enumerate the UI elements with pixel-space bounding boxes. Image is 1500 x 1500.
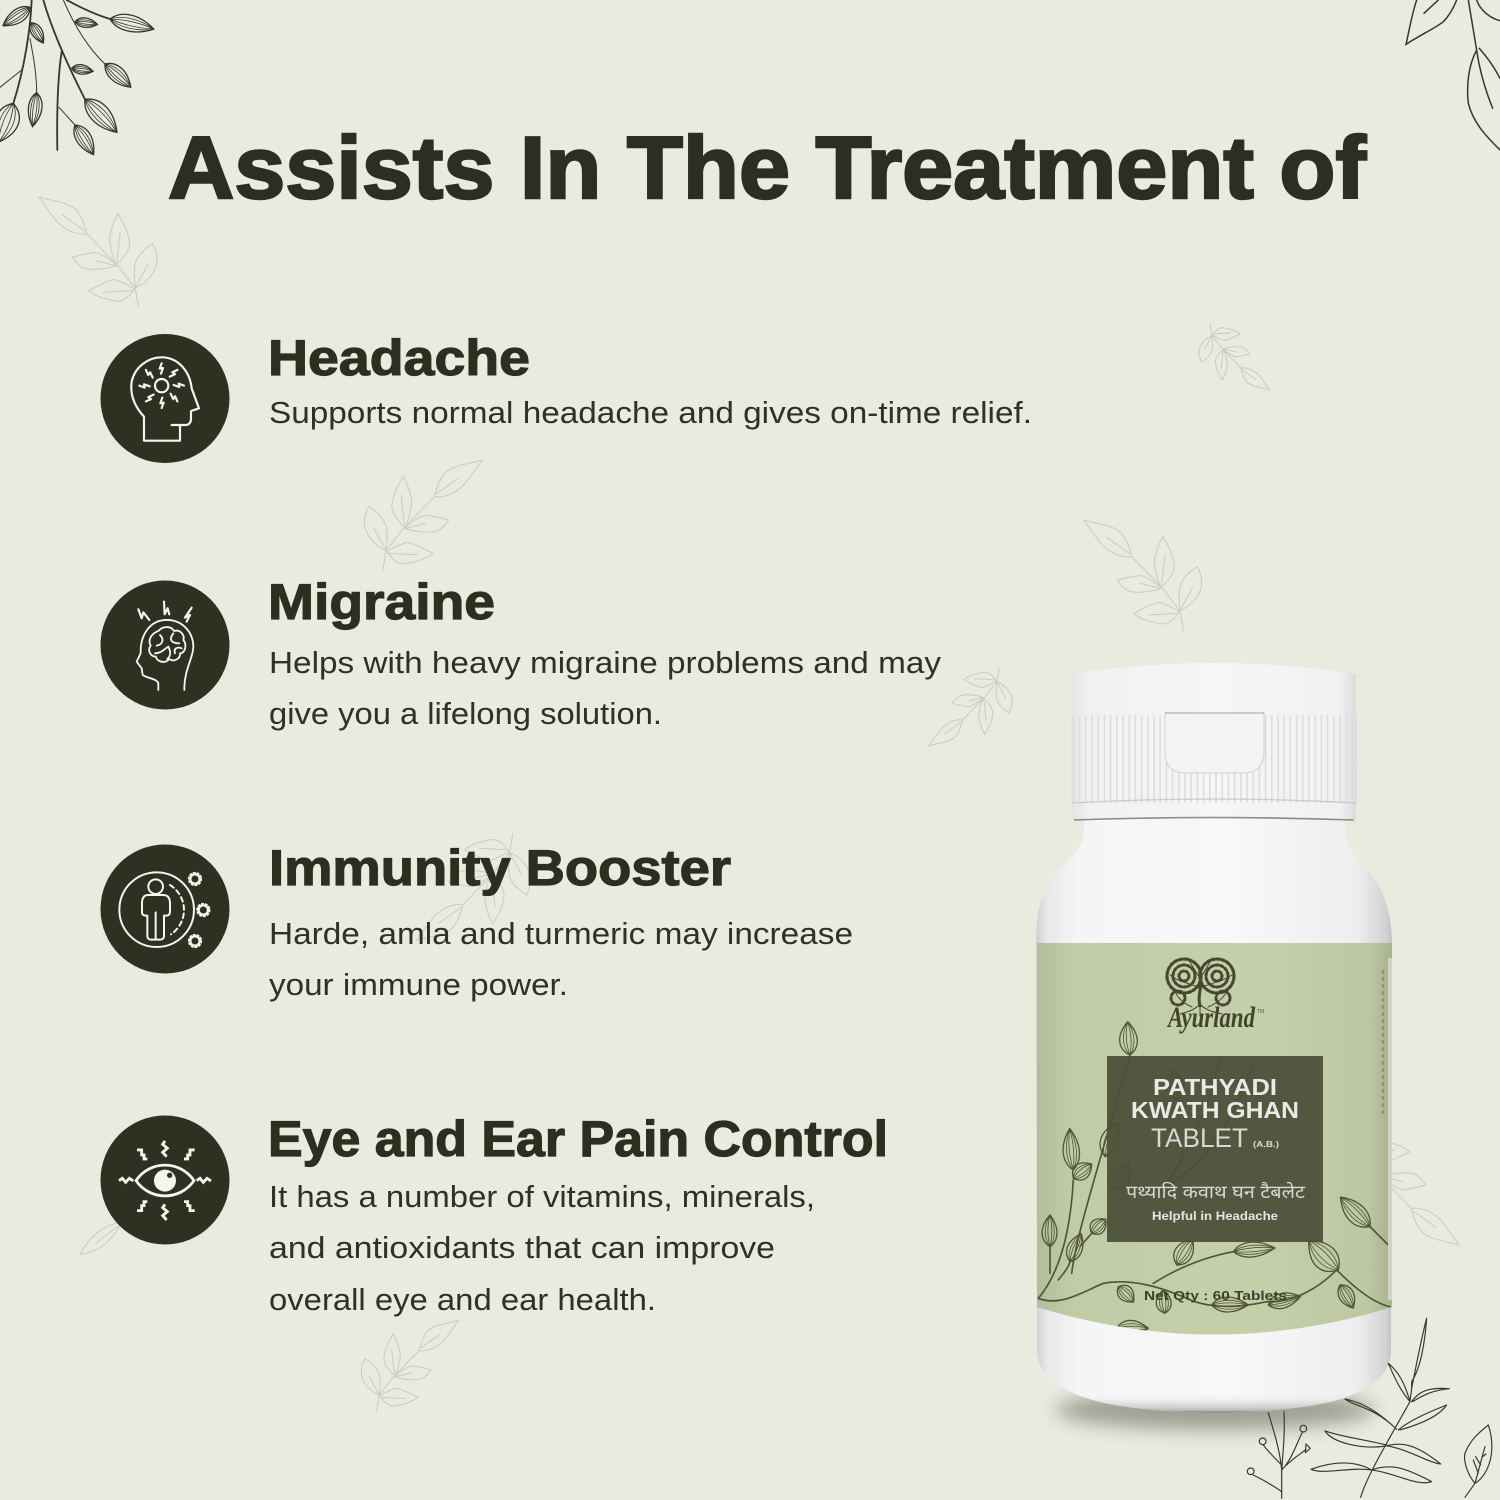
text: migraine description [269,645,942,731]
icon: eye with radiating pain [100,1116,230,1244]
product bottle [1036,663,1392,1430]
bottle cap [1071,663,1357,820]
icon: person in protective circle with germs [100,844,230,974]
heading: headache: Headache [268,330,530,386]
label title panel [1107,1056,1323,1242]
decoration: top-left dark branch [0,0,156,158]
item: eye and ear pain control [100,1111,888,1317]
label right edge strip [1388,958,1392,1300]
product form: TABLET [1151,1123,1248,1153]
plant: fern sprig [1311,1318,1449,1497]
product name line 1: PATHYADI [1153,1074,1277,1100]
plant: bud sprig [1247,1412,1310,1498]
text: eye and ear description: It has a number of vitamins, minerals, [269,1179,815,1214]
item: migraine [100,574,942,731]
text: immunity description [269,916,853,1002]
bottle label [1037,943,1392,1343]
heading: eye and ear pain control: Eye and Ear Pain Control [268,1111,888,1167]
decoration: faint sprig right of headache [1199,324,1270,390]
trademark: TM [1257,1009,1264,1015]
label edge print [1382,970,1384,1115]
product name line 2: KWATH GHAN [1131,1097,1299,1123]
decoration: faint sprig right of bottle [1341,1134,1459,1245]
icon: head with radiating pain [100,334,230,463]
hindi product name: पथ्यादि कवाथ घन टैबलेट [1126,1181,1306,1202]
product form suffix: (A.B.) [1253,1139,1279,1149]
bottle shadow [1055,1390,1375,1430]
heading: immunity booster: Immunity Booster [269,840,731,896]
item: immunity booster [100,840,853,1002]
decoration: top-right dark leaves [1406,0,1500,150]
heading: migraine: Migraine [268,574,495,630]
decoration: faint leaf behind eye icon [80,1222,122,1254]
text: eye and ear description: and antioxidants that can improve [269,1230,775,1265]
logo: Ayurland tree [1167,958,1234,1016]
text: headache description: Supports normal headache and gives on-time relief. [269,395,1032,430]
decoration: bottom-right dark plants [1247,1318,1492,1498]
decoration: faint sprig under headache [364,460,482,571]
title: Assists In The Treatment of [168,118,1367,217]
label botanical artwork [1038,1021,1390,1335]
logo wordmark: Ayurland [1166,1001,1256,1034]
decoration: faint sprig bottom [361,1320,458,1412]
text: eye and ear description [269,1179,815,1317]
item: headache [100,330,1032,463]
text: migraine description: give you a lifelong solution. [269,696,662,731]
text: immunity description: your immune power. [269,967,568,1002]
text: migraine description: Helps with heavy migraine problems and may [269,645,942,680]
bottle base shading [1037,1300,1391,1412]
bottle body [1036,815,1392,1412]
text: immunity description: Harde, amla and turmeric may increase [269,916,853,951]
icon: head with brain and lightning [100,580,230,710]
decoration: faint sprig below top-left branch [39,197,157,308]
decoration: faint sprig left of bottle [929,668,1012,746]
decoration: faint sprig above bottle [1084,520,1202,631]
text: eye and ear description: overall eye and ear health. [269,1282,656,1317]
net quantity: Net Qty : 60 Tablets [1144,1288,1287,1303]
tagline: Helpful in Headache [1152,1209,1278,1223]
plant: single leaf [1465,1425,1492,1497]
decoration: faint sprig behind immunity heading [417,833,531,940]
